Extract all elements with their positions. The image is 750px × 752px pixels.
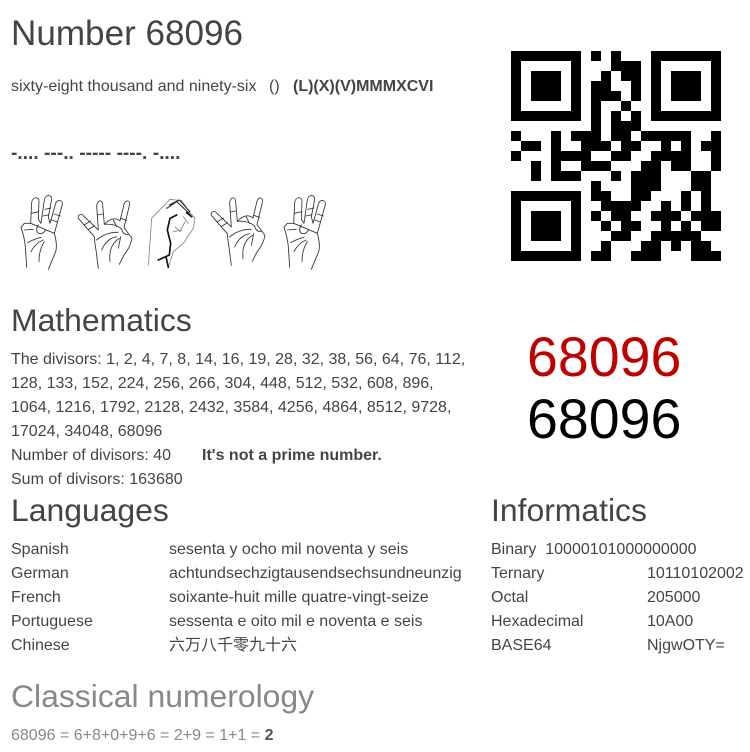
informatics values: NjgwOTY= — [647, 637, 725, 654]
informatics labels: Hexadecimal — [491, 613, 583, 630]
divisors list: 128, 133, 152, 224, 256, 266, 304, 448, 512, 532, 608, 896, — [11, 375, 434, 392]
translations: sessenta e oito mil e noventa e seis — [169, 613, 422, 630]
languages table: Spanish — [11, 541, 69, 558]
divisors list — [11, 351, 465, 440]
translations: achtundsechzigtausendsechsundneunzig — [169, 565, 462, 582]
number in red: 68096 — [527, 326, 681, 388]
number in words and roman numeral: sixty-eight thousand and ninety-six — [11, 78, 256, 95]
translations: 六万八千零九十六 — [169, 637, 297, 654]
number in words and roman numeral: () — [269, 78, 280, 95]
informatics labels: Octal — [491, 589, 528, 606]
hand: digit 9 — [211, 198, 265, 265]
languages table: Chinese — [11, 637, 70, 654]
divisors list: 17024, 34048, 68096 — [11, 423, 162, 440]
hand: digit 8 — [78, 201, 132, 268]
languages table: French — [11, 589, 61, 606]
heading: Informatics: Informatics — [491, 492, 647, 528]
sum of divisors: Sum of divisors: 163680 — [11, 471, 183, 488]
informatics labels: BASE64 — [491, 637, 551, 654]
informatics values: 10A00 — [647, 613, 693, 630]
informatics labels — [491, 541, 697, 654]
number of divisors: Number of divisors: 40 — [11, 447, 171, 464]
number in words and roman numeral — [11, 78, 433, 95]
number in black: 68096 — [527, 388, 681, 450]
informatics values — [647, 565, 744, 654]
translations — [169, 541, 462, 654]
informatics values: 10110102002 — [647, 565, 744, 582]
translations: sesenta y ocho mil noventa y seis — [169, 541, 408, 558]
heading: Languages: Languages — [11, 492, 169, 528]
number in words and roman numeral: (L)(X)(V)MMMXCVI — [293, 78, 433, 95]
languages table: German — [11, 565, 69, 582]
divisors list: 1064, 1216, 1792, 2128, 2432, 3584, 4256, 4864, 8512, 9728, — [11, 399, 451, 416]
numerology calculation: 68096 = 6+8+0+9+6 = 2+9 = 1+1 = 2 — [11, 727, 273, 744]
sign language hands — [20, 195, 326, 270]
languages table — [11, 541, 93, 654]
morse code: -.... ---.. ----- ----. -.... — [11, 143, 180, 164]
hand: digit 6 — [284, 196, 325, 269]
informatics labels: Binary 10000101000000000 — [491, 541, 697, 558]
prime status: It's not a prime number. — [202, 447, 382, 464]
languages table: Portuguese — [11, 613, 93, 630]
informatics labels: Ternary — [491, 565, 544, 582]
heading: Classical numerology: Classical numerology — [11, 678, 314, 714]
translations: soixante-huit mille quatre-vingt-seize — [169, 589, 429, 606]
divisors list: The divisors: 1, 2, 4, 7, 8, 14, 16, 19, 28, 32, 38, 56, 64, 76, 112, — [11, 351, 465, 368]
heading: Mathematics: Mathematics — [11, 302, 192, 338]
title: Number 68096 — [11, 14, 243, 53]
hand: digit 6 — [21, 196, 62, 269]
informatics values: 205000 — [647, 589, 700, 606]
hand: digit 0 — [148, 199, 195, 267]
QR code — [511, 51, 721, 261]
